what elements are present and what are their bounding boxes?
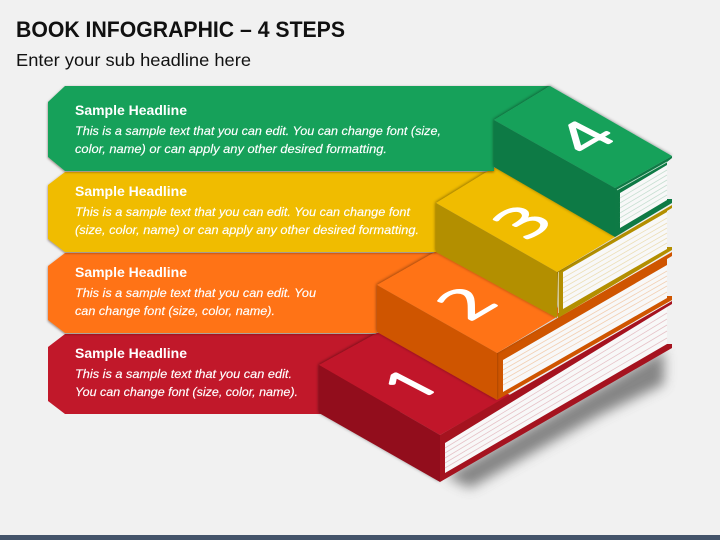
book 3 cover and spine [436,165,625,318]
step 2 body: This is a sample text that you can edit. You [75,286,316,300]
panel: step 4 banner [48,86,550,171]
book 3 pages [557,205,672,318]
step 3 body: (size, color, name) or can apply any other desired formatting. [75,223,419,237]
book 2 pages [497,252,672,400]
panel: step 2 banner [48,253,435,333]
book 1 [319,301,672,482]
book 2 cover and spine [377,250,565,400]
footer bar [0,535,720,540]
book 1 pages [440,301,672,482]
step 4 body: color, name) or can apply any other desired formatting. [75,142,387,156]
book 3 number: 3 [481,199,565,245]
book 1 number: 1 [369,362,453,408]
step 2 body: can change font (size, color, name). [75,304,275,318]
step 3 body [75,205,419,237]
book 4 number: 4 [543,114,627,160]
book 4 [494,86,672,237]
subtitle: Enter your sub headline here [16,50,251,70]
panel: step 3 banner [48,172,493,252]
step 1 body [75,367,298,399]
step 4 headline: Sample Headline [75,102,187,118]
book 4 cover and spine [494,86,672,237]
step 3 headline: Sample Headline [75,183,187,199]
step 4 body [75,124,441,156]
book 1 cover and spine [319,330,510,482]
step 2 headline: Sample Headline [75,264,187,280]
panel: step 1 banner [48,334,400,414]
step 2 body [75,286,316,318]
step 1 headline: Sample Headline [75,345,187,361]
book 3 [436,165,672,318]
step 3 body: This is a sample text that you can edit. You can change font [75,205,411,219]
step 4 body: This is a sample text that you can edit. You can change font (size, [75,124,441,138]
book 2 number: 2 [425,280,509,326]
book 4 pages [615,156,672,237]
book stack shadow [446,350,664,488]
step 1 body: This is a sample text that you can edit. [75,367,292,381]
title: BOOK INFOGRAPHIC – 4 STEPS [16,17,345,42]
step 1 body: You can change font (size, color, name). [75,385,298,399]
book 2 [377,250,672,400]
